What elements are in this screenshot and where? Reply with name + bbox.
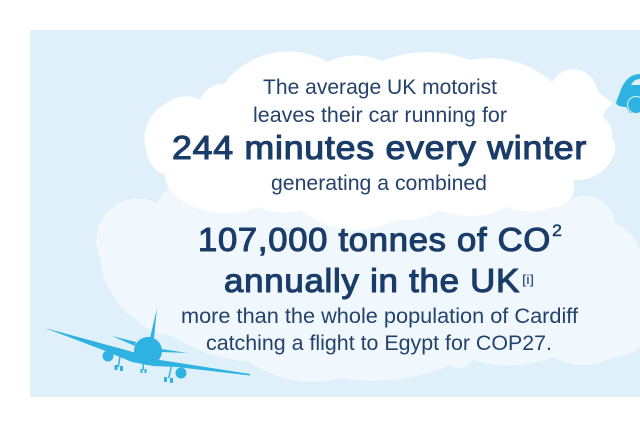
text: comparison line 1: more than the whole population of Cardiff — [181, 305, 578, 328]
icon: car — [616, 74, 640, 114]
icon: plane — [45, 308, 250, 383]
heading: annually in the UK: [i] — [522, 272, 534, 287]
heading: 107,000 tonnes of CO2: 2 — [552, 221, 562, 240]
cloud: upper white cloud — [144, 51, 615, 230]
heading: 107,000 tonnes of CO2: 107,000 tonnes of CO — [198, 221, 551, 258]
text: intro line 2: leaves their car running for — [253, 104, 507, 127]
text: comparison line 2: catching a flight to Egypt for COP27. — [206, 332, 552, 355]
cloud: lower pale cloud — [96, 173, 640, 382]
text: intro line 1: The average UK motorist — [263, 76, 497, 99]
text: generating a combined: generating a combined — [271, 172, 487, 195]
heading: 244 minutes every winter: 244 minutes every winter — [172, 129, 587, 166]
heading: annually in the UK: annually in the UK — [224, 262, 520, 299]
